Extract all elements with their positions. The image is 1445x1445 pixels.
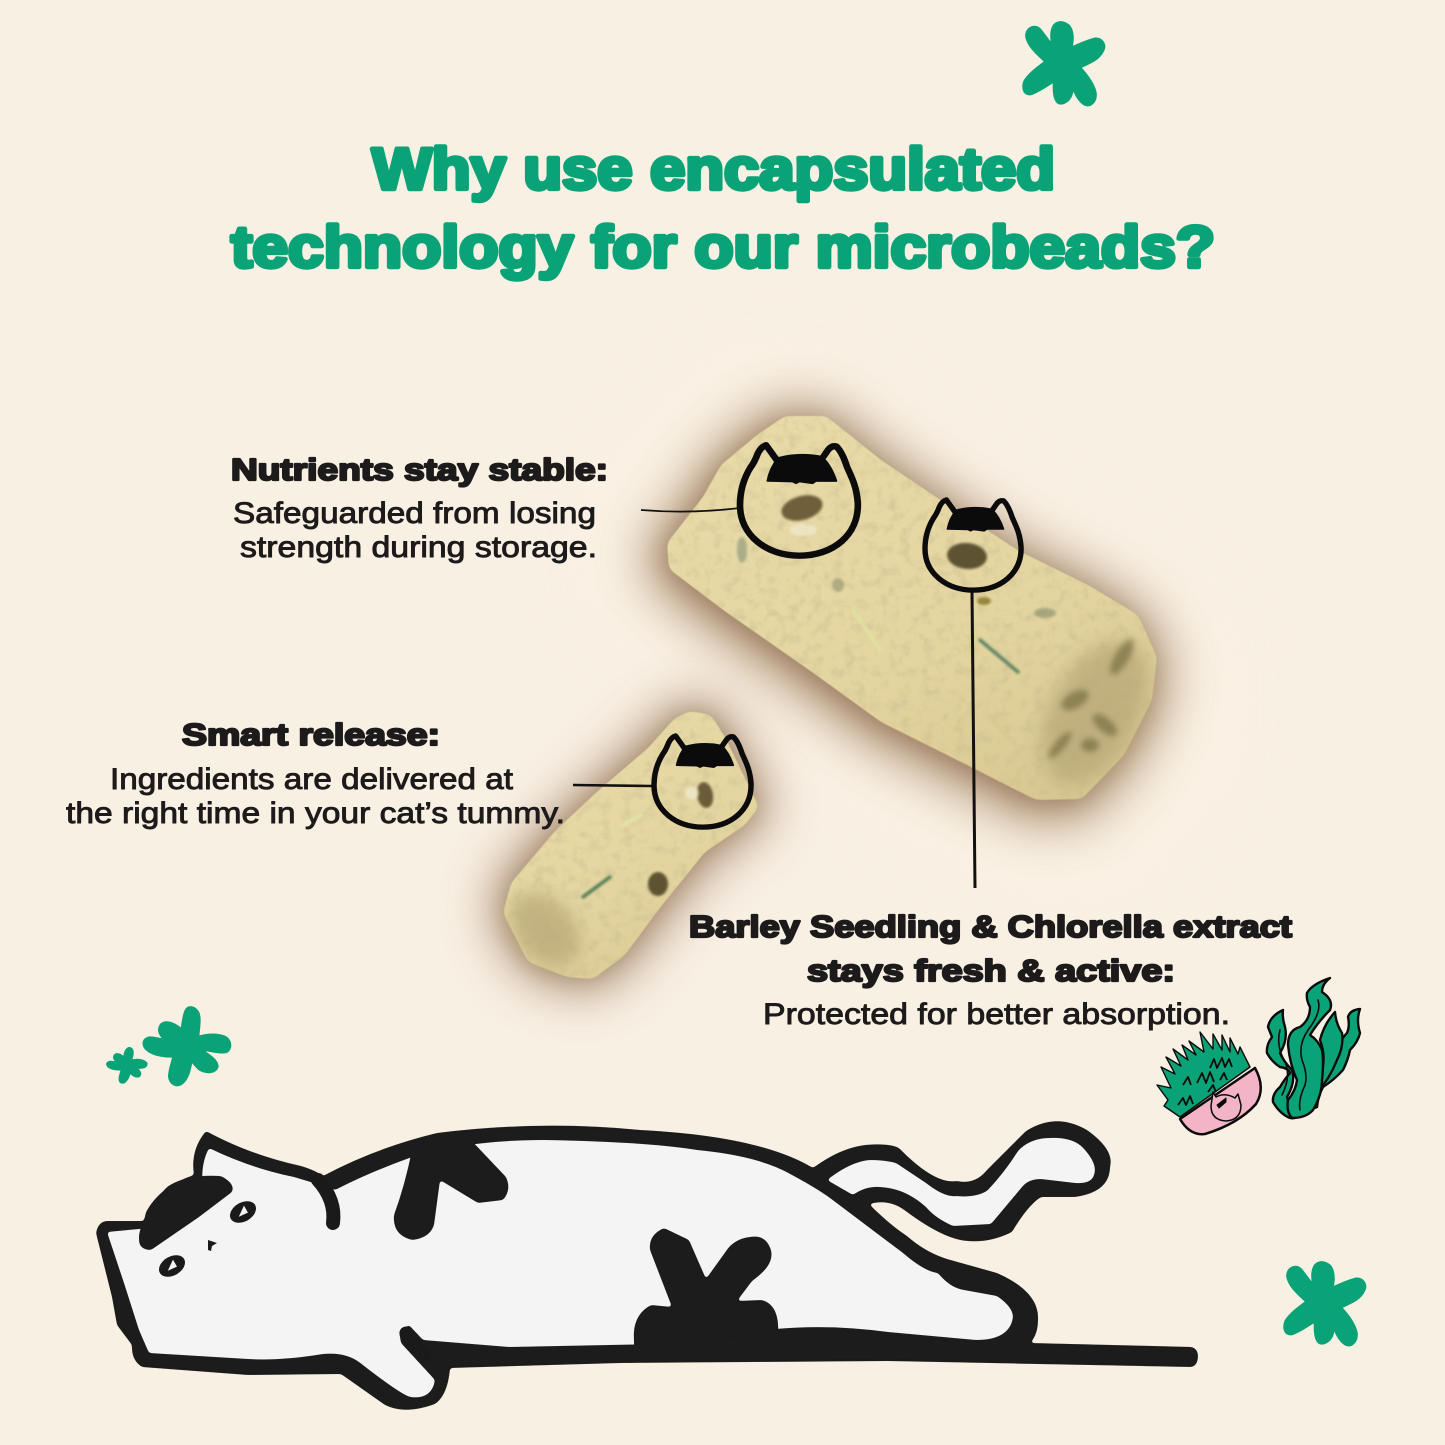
text block: nutrients stay stable: Nutrients stay stable: — [231, 452, 608, 487]
text block: barley seedling and chlorella — [689, 909, 1292, 1031]
icon: cat head magnifier large — [740, 445, 858, 556]
icon: small green flower pair — [107, 1007, 230, 1085]
icon: cat head magnifier middle — [925, 500, 1021, 590]
text block: smart release: Ingredients are delivered at — [110, 763, 514, 796]
cat tail fill — [827, 1138, 1095, 1226]
text block: barley seedling and chlorella: stays fresh & active: — [807, 953, 1175, 988]
icon: cat head magnifier small — [654, 736, 751, 827]
cat neck stroke — [318, 1180, 333, 1223]
cat nose — [208, 1240, 217, 1251]
icon: top green flower — [1024, 23, 1104, 105]
icon: barley grass bowl — [1157, 1032, 1261, 1134]
callout line: smart release — [573, 785, 652, 786]
text block: smart release: the right time in your cat’s tummy. — [66, 797, 565, 830]
cat belly spot — [634, 1228, 778, 1350]
callout line: nutrients stable — [641, 508, 740, 512]
callout line: barley and chlorella — [972, 592, 975, 888]
cat forehead patch — [139, 1176, 233, 1250]
cat paw stroke — [406, 1333, 424, 1356]
text block: barley seedling and chlorella: Protected for better absorption. — [763, 998, 1230, 1031]
cat shoulder spot — [394, 1138, 508, 1240]
illustration: lying cat — [96, 1121, 1198, 1410]
text block: nutrients stay stable — [231, 452, 608, 564]
title — [231, 137, 1215, 280]
text block: nutrients stay stable: Safeguarded from losing — [233, 497, 596, 530]
cat eye upper — [226, 1197, 260, 1227]
title: Why use encapsulated — [372, 137, 1055, 202]
large microbead with shadow — [615, 394, 1198, 850]
text block: nutrients stay stable: strength during storage. — [240, 531, 597, 564]
cat outline — [96, 1121, 1198, 1410]
text block: smart release: Smart release: — [182, 717, 440, 752]
text block: smart release — [66, 717, 565, 830]
small microbead with shadow — [496, 711, 759, 982]
title: technology for our microbeads? — [231, 215, 1215, 280]
cat eye lower — [155, 1251, 189, 1281]
cat body fill — [107, 1140, 1013, 1397]
icon: chlorella seaweed — [1267, 978, 1360, 1118]
text block: barley seedling and chlorella: Barley Seedling & Chlorella extract — [689, 909, 1292, 944]
icon: lower right green flower — [1285, 1263, 1365, 1345]
